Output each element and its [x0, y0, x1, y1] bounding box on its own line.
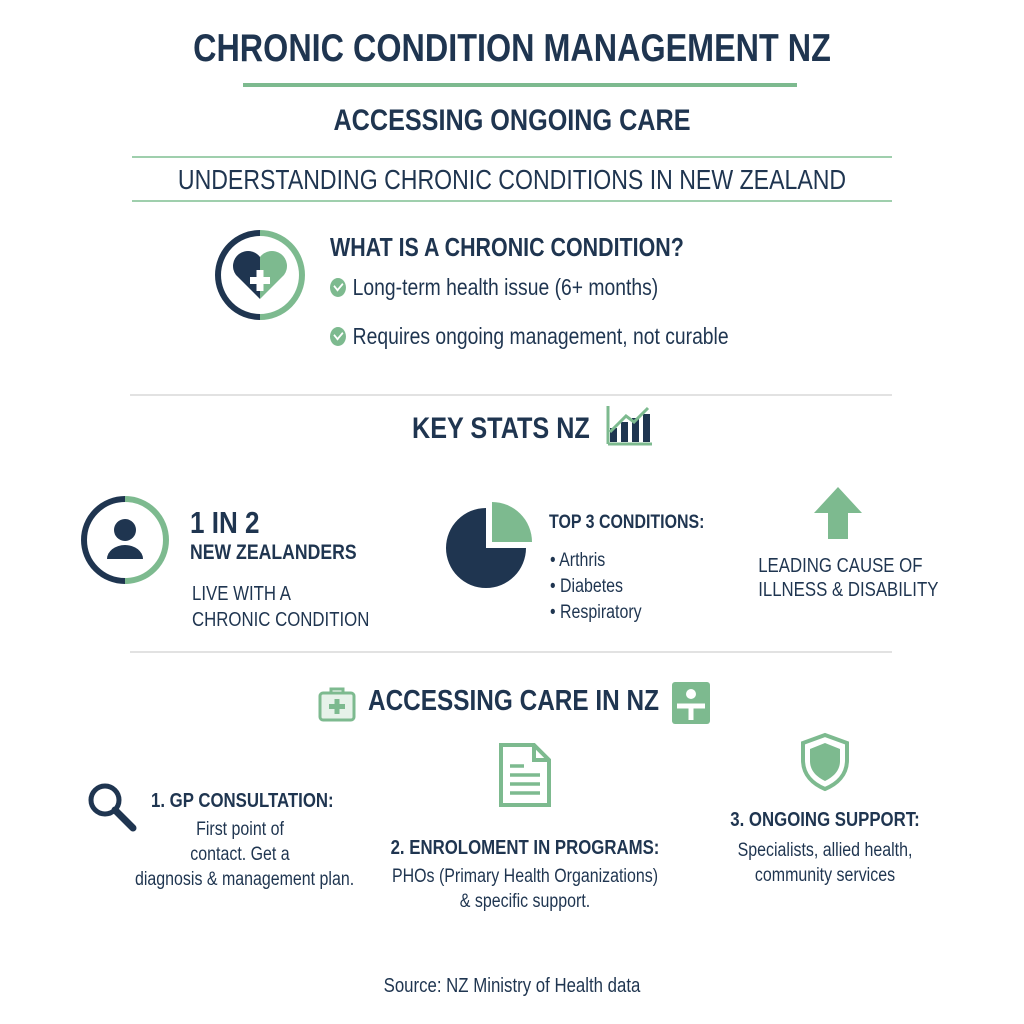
source footer: Source: NZ Ministry of Health data [384, 975, 640, 997]
stat: top 3 conditions: TOP 3 CONDITIONS: [549, 512, 704, 533]
stat: leading cause: LEADING CAUSE OF [758, 555, 923, 577]
icon: heart circle [215, 230, 305, 320]
step 1: contact. Get a [190, 844, 290, 865]
stat: 1 in 2: 1 IN 2 [190, 505, 259, 540]
step 3: 3. ONGOING SUPPORT: [730, 809, 920, 831]
stat: 1 in 2: LIVE WITH A [192, 583, 291, 605]
text: what is a chronic condition [330, 234, 729, 349]
step 3 [730, 732, 920, 886]
text: what is a chronic condition: Long-term health issue (6+ months) [353, 274, 658, 300]
step 1: diagnosis & management plan. [135, 869, 354, 890]
stat: top 3 conditions [446, 502, 704, 623]
stat: 1 in 2: CHRONIC CONDITION [192, 609, 369, 631]
icon: bar chart [606, 406, 652, 446]
step 3: community services [755, 865, 895, 886]
heading: key stats [412, 406, 652, 446]
step 2: 2. ENROLOMENT IN PROGRAMS: [391, 837, 659, 859]
step 1 [88, 784, 354, 890]
stat: top 3 conditions: • Diabetes [550, 576, 623, 597]
text: what is a chronic condition: WHAT IS A CHRONIC CONDITION? [330, 234, 684, 262]
stat: top 3 conditions: • Arthris [550, 550, 605, 571]
step 2: PHOs (Primary Health Organizations) [392, 866, 658, 887]
stat: 1 in 2 [81, 496, 369, 631]
heading: accessing care: ACCESSING CARE IN NZ [368, 685, 659, 717]
step 1: First point of [196, 819, 284, 840]
stat: leading cause [758, 487, 938, 601]
title: CHRONIC CONDITION MANAGEMENT NZ [193, 27, 831, 70]
section heading: understanding: UNDERSTANDING CHRONIC CONDITIONS IN NEW ZEALAND [178, 164, 846, 195]
stat: top 3 conditions: • Respiratory [550, 602, 642, 623]
heading: key stats: KEY STATS NZ [412, 412, 590, 445]
step 3: Specialists, allied health, [738, 840, 912, 861]
heading: accessing care [318, 682, 710, 724]
stat: leading cause: ILLNESS & DISABILITY [758, 579, 938, 601]
text: what is a chronic condition: Requires ongoing management, not curable [353, 323, 729, 349]
step 2: & specific support. [460, 891, 590, 912]
step 2 [391, 743, 659, 912]
subtitle: ACCESSING ONGOING CARE [333, 104, 691, 137]
stat: 1 in 2: NEW ZEALANDERS [190, 541, 357, 564]
step 1: 1. GP CONSULTATION: [151, 790, 334, 812]
